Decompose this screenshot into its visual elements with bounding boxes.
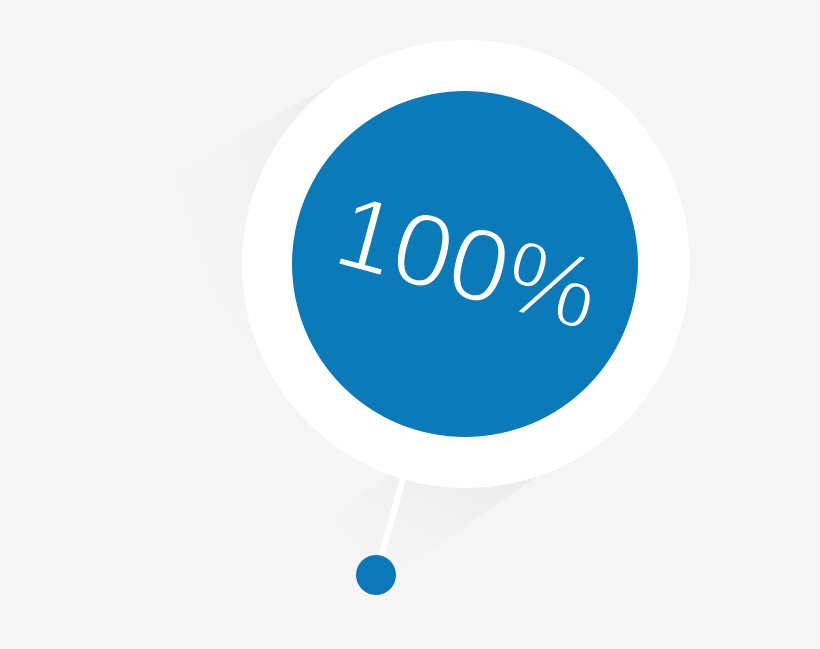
pointer stem: [379, 428, 417, 565]
percentage label: 100%: [324, 173, 611, 353]
outer white ring: [242, 40, 690, 488]
shadow: long diagonal: [140, 85, 560, 580]
pointer dot: [356, 555, 396, 595]
blue disc: [292, 91, 638, 437]
